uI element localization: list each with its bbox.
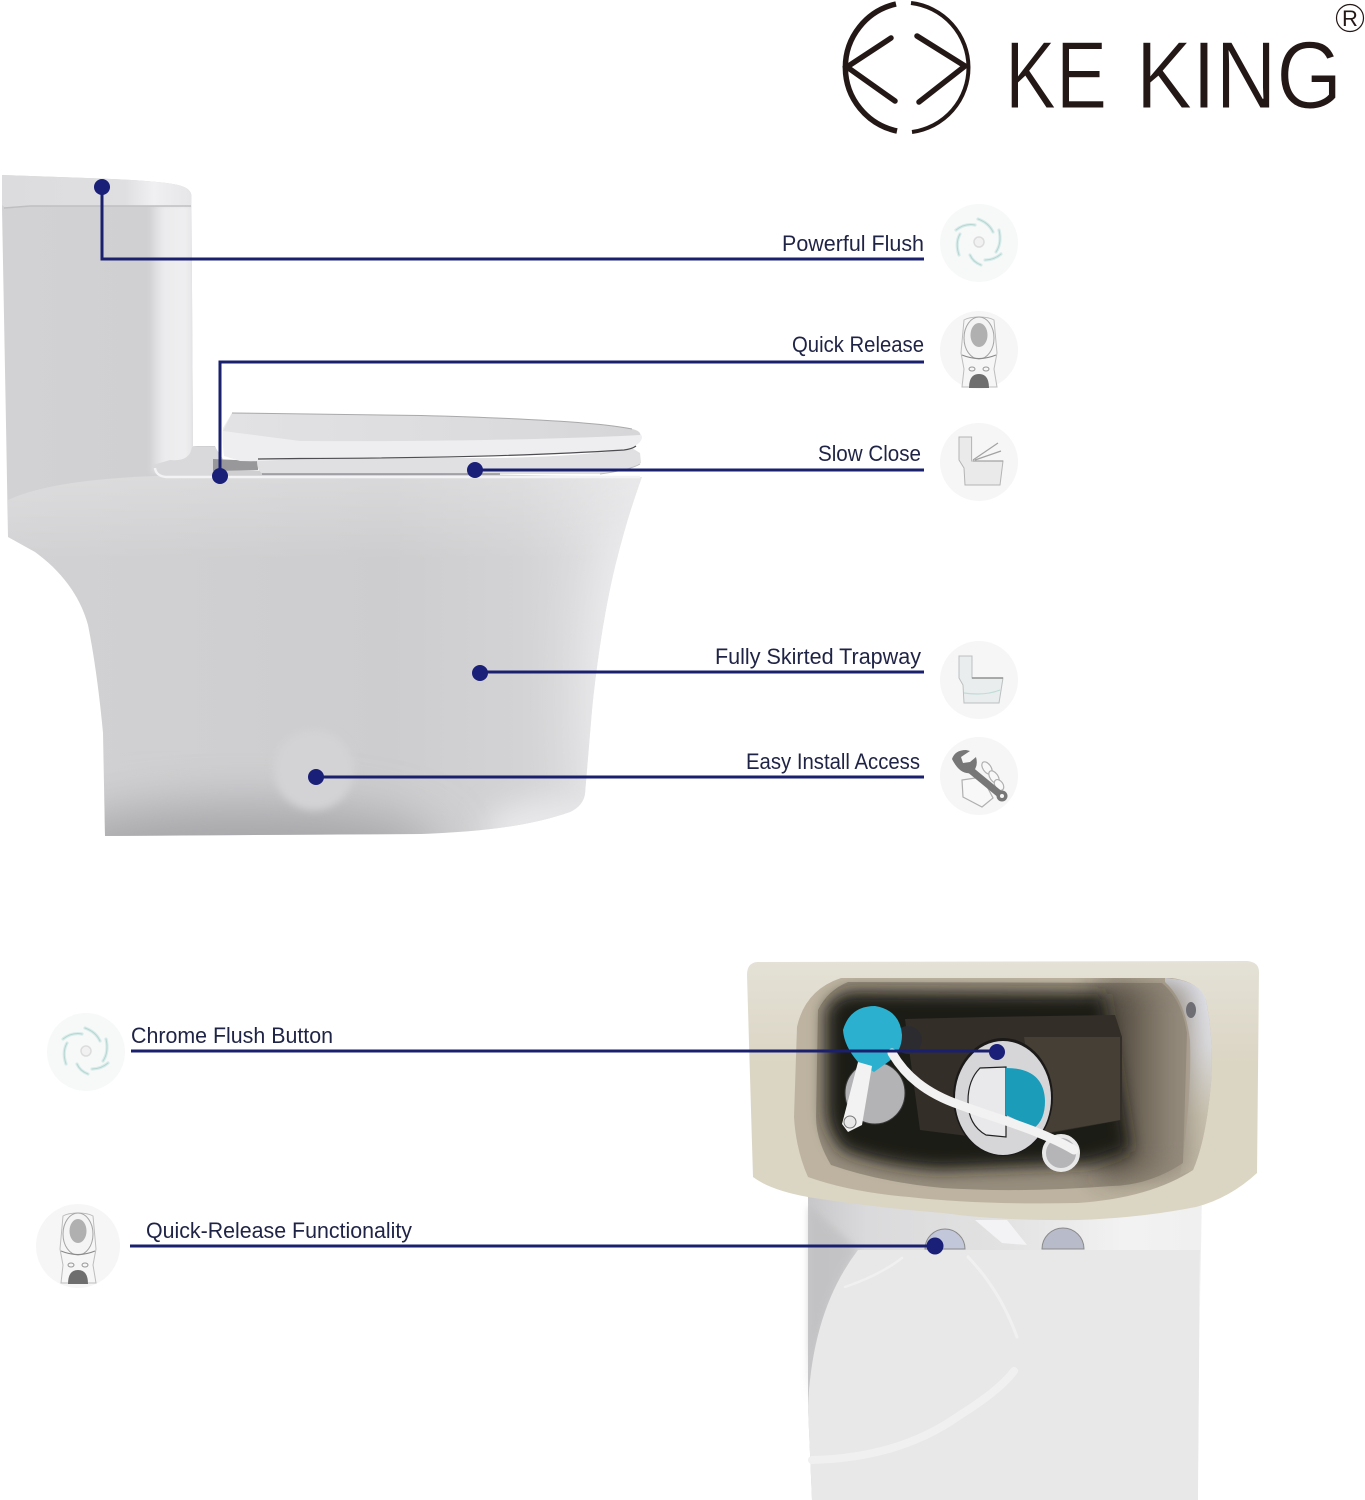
logo wordmark bbox=[1005, 22, 1342, 129]
lower toilet body bbox=[808, 1190, 1202, 1500]
callout leader: Chrome Flush Button bbox=[131, 1044, 1005, 1060]
callout leader: Easy Install Access bbox=[308, 769, 924, 785]
callout leader: Quick Release bbox=[212, 362, 924, 484]
logo: KE KING bbox=[845, 3, 1364, 132]
callout leader: Powerful Flush bbox=[94, 179, 924, 259]
logo emblem bbox=[845, 3, 968, 132]
registered mark: R bbox=[1342, 6, 1358, 31]
label: Quick Release: Quick Release bbox=[792, 332, 924, 357]
callout leader: Slow Close bbox=[467, 462, 924, 478]
body top highlight bbox=[155, 468, 640, 477]
label: Quick-Release Functionality: Quick-Release Functionality bbox=[146, 1218, 412, 1243]
icon: quick release bbox=[940, 311, 1018, 389]
label: Powerful Flush: Powerful Flush bbox=[782, 231, 924, 256]
label: Easy Install Access: Easy Install Access bbox=[746, 749, 920, 774]
tank screw hole bbox=[1186, 1002, 1196, 1018]
icon: wrench in hand bbox=[940, 737, 1018, 815]
white tube bbox=[892, 1053, 1074, 1150]
callout leader: Quick-Release Functionality bbox=[130, 1238, 944, 1254]
label: Slow Close: Slow Close bbox=[818, 441, 921, 466]
neck bbox=[150, 205, 194, 473]
tank lid bbox=[2, 175, 192, 208]
label: Chrome Flush Button: Chrome Flush Button bbox=[131, 1023, 333, 1048]
logo wordmark: KE bbox=[1005, 22, 1107, 129]
registered mark bbox=[1336, 4, 1364, 32]
icon: slow close bbox=[940, 423, 1018, 501]
seat ring bbox=[257, 448, 641, 474]
label: Fully Skirted Trapway: Fully Skirted Trapway bbox=[715, 644, 921, 669]
icon: powerful flush swirl bbox=[940, 204, 1018, 282]
icon: chrome flush swirl bbox=[47, 1013, 125, 1091]
overflow ring bbox=[1044, 1136, 1078, 1170]
flush button bbox=[953, 1038, 1053, 1156]
side access cap bbox=[274, 730, 354, 810]
blue fill valve float bbox=[842, 1006, 922, 1132]
toilet side view photo bbox=[2, 175, 642, 836]
icon: fully skirted trapway bbox=[940, 641, 1018, 719]
tank interior photo bbox=[747, 961, 1259, 1500]
hinge bbox=[213, 459, 258, 471]
logo wordmark: KING bbox=[1136, 22, 1342, 129]
seat base ledge bbox=[153, 447, 225, 476]
callout leader: Fully Skirted Trapway bbox=[472, 665, 924, 681]
tank opening bbox=[794, 978, 1212, 1203]
tank rim bbox=[747, 961, 1259, 1220]
seat lid bbox=[223, 413, 642, 461]
icon: quick-release functionality bbox=[36, 1204, 120, 1288]
valve block bbox=[905, 1015, 1122, 1140]
